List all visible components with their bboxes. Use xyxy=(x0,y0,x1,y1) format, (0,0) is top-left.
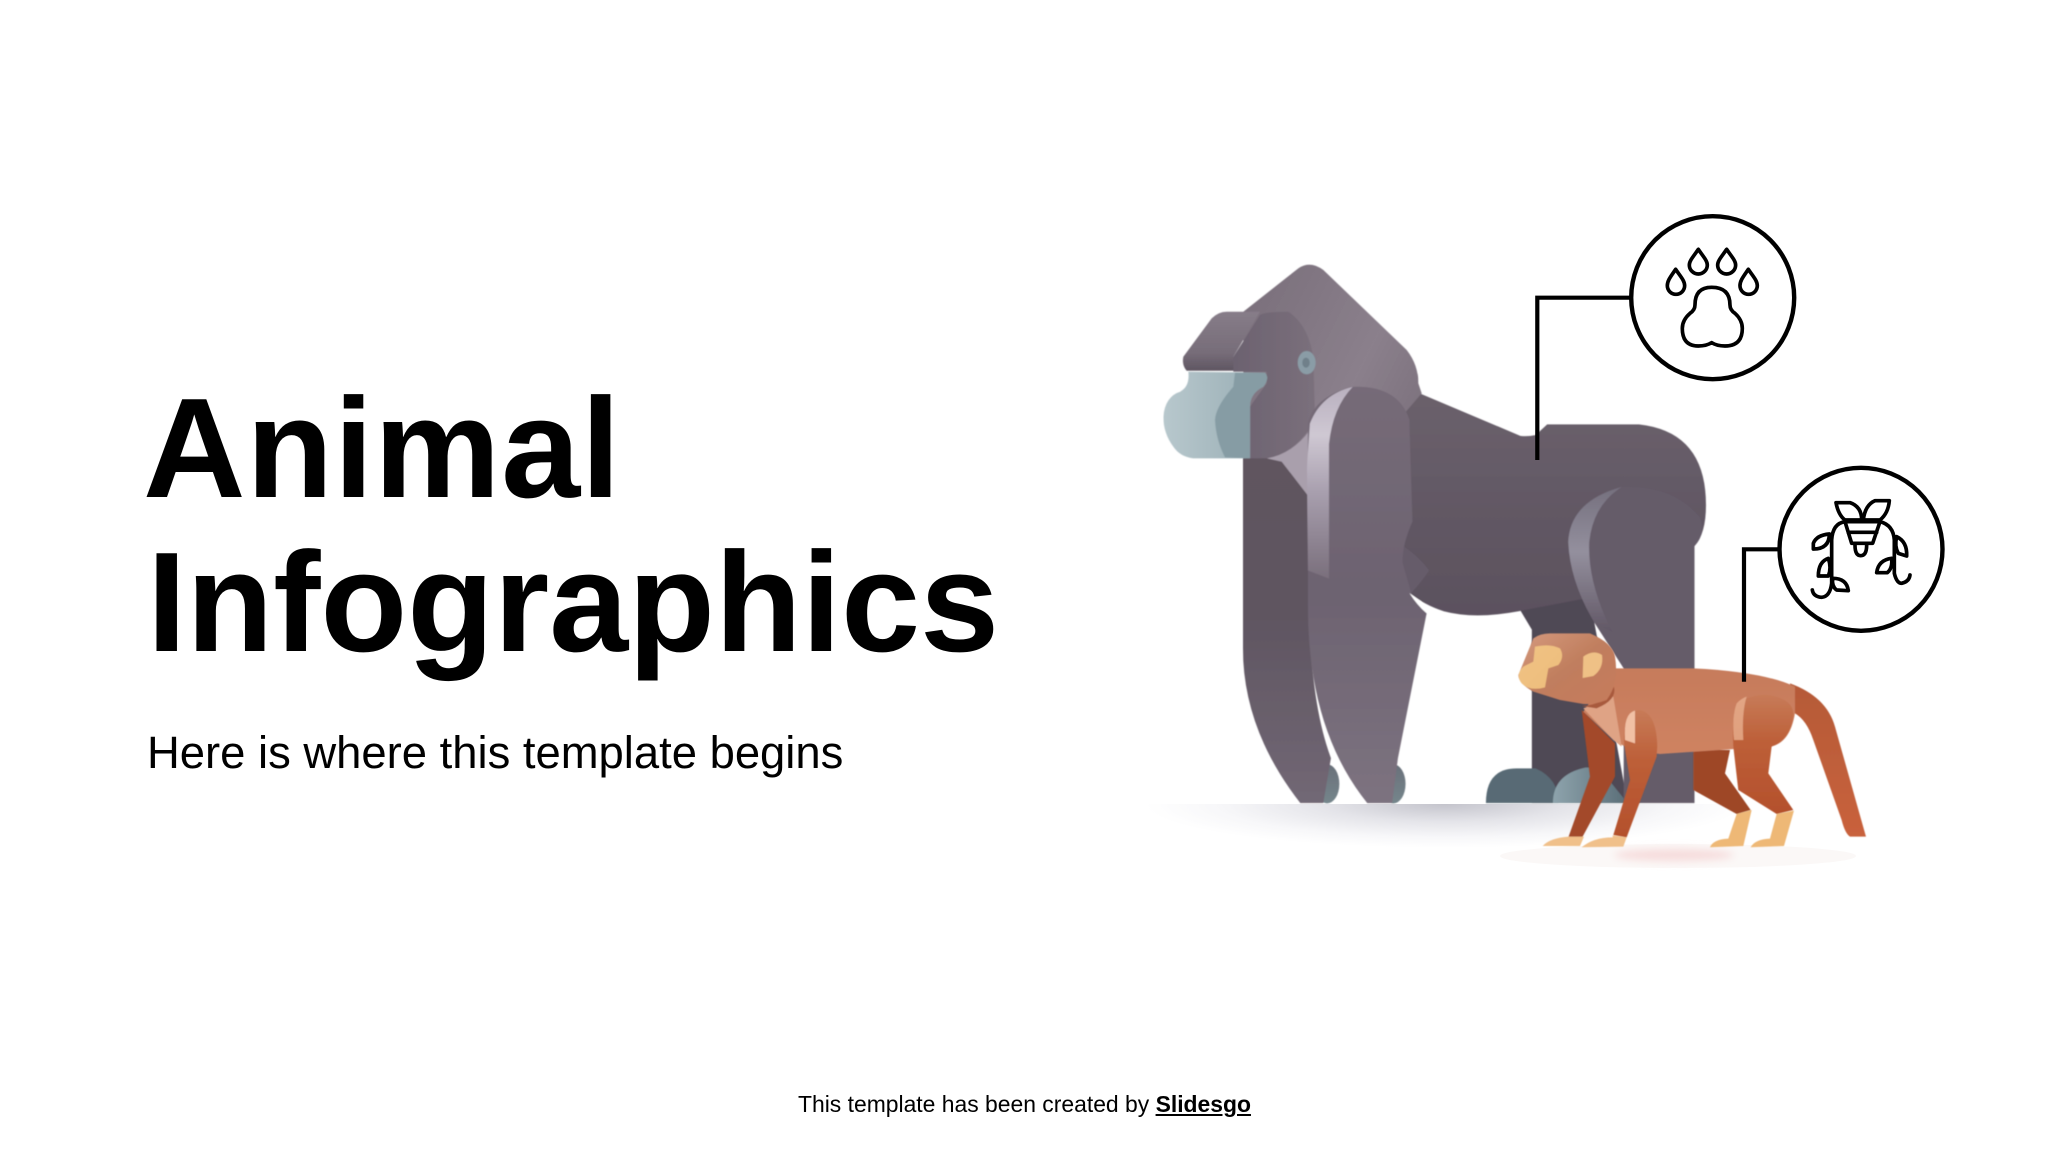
ground shadow: gorilla xyxy=(1145,804,1745,850)
near front leg xyxy=(1613,710,1657,837)
skull xyxy=(1243,265,1422,477)
collar shadow xyxy=(1582,687,1614,708)
chest patch xyxy=(1267,417,1327,498)
monkey xyxy=(1518,633,1866,847)
callout: vines xyxy=(1744,468,1942,682)
footer credit: This template has been created by Slidesgo xyxy=(798,1091,1251,1117)
circle xyxy=(1631,216,1794,379)
ground shadow: monkey xyxy=(1500,844,1856,868)
rear far leg xyxy=(1518,595,1628,803)
near rear leg highlight xyxy=(1733,697,1747,740)
armpit patch xyxy=(1400,544,1429,593)
title xyxy=(143,369,999,682)
far paw xyxy=(1315,764,1339,803)
icon: hanging plant xyxy=(1812,501,1910,597)
body xyxy=(1360,362,1706,615)
muzzle xyxy=(1163,372,1267,458)
front feet xyxy=(1543,835,1627,847)
near paw xyxy=(1381,764,1406,803)
muzzle shade xyxy=(1215,373,1267,458)
chest xyxy=(1583,697,1622,747)
callout: paw xyxy=(1537,216,1794,460)
gorilla xyxy=(1163,265,1706,803)
brow xyxy=(1183,312,1260,371)
leader line xyxy=(1744,549,1782,682)
near arm shoulder strip xyxy=(1307,387,1353,579)
circle xyxy=(1780,468,1942,631)
leader line xyxy=(1537,298,1632,460)
far rear leg xyxy=(1693,750,1751,814)
subtitle: Here is where this template begins xyxy=(147,727,843,778)
belly gap xyxy=(1409,593,1427,613)
far front leg xyxy=(1568,710,1615,838)
head xyxy=(1518,633,1616,704)
tail xyxy=(1790,683,1866,837)
head xyxy=(1163,265,1422,498)
torso xyxy=(1583,668,1795,754)
icon: wet paw xyxy=(1667,249,1757,346)
title: Infographics xyxy=(147,523,999,682)
rear hip highlight xyxy=(1568,487,1622,632)
ear xyxy=(1583,653,1602,678)
title: Animal xyxy=(143,369,621,528)
face patch xyxy=(1519,645,1562,689)
far arm xyxy=(1243,456,1331,803)
near rear leg xyxy=(1733,695,1793,814)
near arm xyxy=(1308,387,1427,803)
near front leg highlight xyxy=(1625,711,1635,743)
rear feet xyxy=(1486,768,1628,803)
rear near leg xyxy=(1568,487,1702,803)
rear feet xyxy=(1710,810,1794,847)
eye xyxy=(1298,351,1316,374)
face plane xyxy=(1233,312,1315,458)
